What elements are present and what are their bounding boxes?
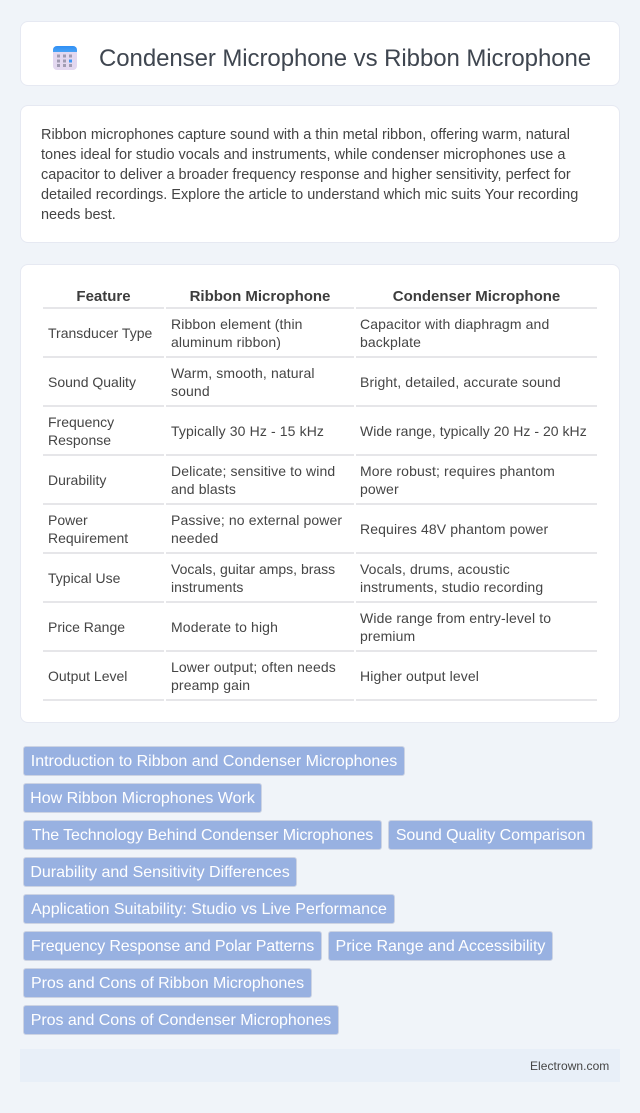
text: Requirement (48, 530, 128, 546)
text: Output Level (48, 668, 127, 684)
chip: condenser pros and cons (23, 1005, 339, 1035)
text: Delicate; sensitive to wind (171, 463, 335, 479)
text: Sound Quality (48, 374, 136, 390)
chip: sound quality: Sound Quality Comparison (396, 827, 585, 844)
text: Requires 48V phantom power (360, 521, 548, 537)
text: Frequency (48, 414, 114, 430)
footer (20, 1049, 620, 1082)
text: aluminum ribbon) (171, 334, 281, 350)
table row: Power Requirement (48, 512, 548, 546)
text: Capacitor with diaphragm and (360, 316, 549, 332)
text: Passive; no external power (171, 512, 342, 528)
chip: how ribbon works (23, 783, 262, 813)
chip: frequency (23, 931, 322, 961)
text: Higher output level (360, 668, 479, 684)
table row: Price Range (48, 610, 551, 644)
text: Lower output; often needs (171, 659, 336, 675)
text: premium (360, 628, 415, 644)
icon: calendar grid (53, 46, 77, 70)
text: power (360, 481, 399, 497)
table: header row (76, 288, 560, 305)
text: Moderate to high (171, 619, 278, 635)
text block: introduction: detailed recordings. Explore the article to understand which mic suits Your recording (41, 187, 578, 203)
heading: Feature: Feature (76, 288, 131, 305)
chip: how ribbon works: How Ribbon Microphones Work (30, 790, 255, 807)
panel: header (20, 21, 620, 86)
text: instruments, studio recording (360, 579, 543, 595)
chip: condenser pros and cons: Pros and Cons of Condenser Microphones (31, 1012, 331, 1029)
text: Bright, detailed, accurate sound (360, 374, 561, 390)
chip: condenser technology (23, 820, 382, 850)
text block: introduction: needs best. (41, 207, 116, 223)
text: Warm, smooth, natural (171, 365, 315, 381)
text: Ribbon element (thin (171, 316, 303, 332)
title: Condenser Microphone vs Ribbon Microphone (99, 45, 591, 72)
text: Price Range (48, 619, 125, 635)
chip: condenser technology: The Technology Behind Condenser Microphones (32, 827, 373, 844)
chip: introduction link: Introduction to Ribbon and Condenser Microphones (31, 753, 397, 770)
heading: Condenser Microphone: Condenser Microphone (393, 288, 560, 305)
text: preamp gain (171, 677, 250, 693)
chip: application (23, 894, 395, 924)
chip: durability: Durability and Sensitivity Differences (30, 864, 290, 881)
table row: Durability (48, 463, 555, 497)
footer credit: Electrown.com (530, 1059, 609, 1073)
chip: price (328, 931, 553, 961)
chip: frequency: Frequency Response and Polar Patterns (31, 938, 314, 955)
chip: price: Price Range and Accessibility (336, 938, 545, 955)
chip: introduction link (23, 746, 405, 776)
panel: introduction (20, 105, 620, 243)
chip: ribbon pros and cons (23, 968, 312, 998)
text: Typically 30 Hz - 15 kHz (171, 423, 324, 439)
text block: introduction (41, 127, 578, 223)
chip: application: Application Suitability: Studio vs Live Performance (31, 901, 387, 918)
chip: sound quality (388, 820, 593, 850)
text: Response (48, 432, 111, 448)
chip: durability (23, 857, 297, 887)
text: Typical Use (48, 570, 120, 586)
text: More robust; requires phantom (360, 463, 555, 479)
table row: Typical Use (48, 561, 543, 595)
panel: comparison table (20, 264, 620, 723)
table row: Transducer Type (48, 316, 549, 350)
text block: introduction: Ribbon microphones capture sound with a thin metal ribbon, offering warm, natural (41, 127, 570, 143)
table row: Sound Quality (48, 365, 561, 399)
text: Vocals, guitar amps, brass (171, 561, 335, 577)
text: Wide range, typically 20 Hz - 20 kHz (360, 423, 587, 439)
text: Vocals, drums, acoustic (360, 561, 510, 577)
text block: introduction: tones ideal for studio vocals and instruments, while condenser microphones use a (41, 147, 565, 163)
text: Power (48, 512, 88, 528)
table row: Output Level (48, 659, 479, 693)
text: backplate (360, 334, 421, 350)
text: Durability (48, 472, 106, 488)
text: instruments (171, 579, 243, 595)
text: and blasts (171, 481, 236, 497)
text: needed (171, 530, 218, 546)
text: Wide range from entry-level to (360, 610, 551, 626)
text block: introduction: capacitor to deliver a broader frequency response and higher sensitivity, perfect for (41, 167, 571, 183)
heading: Ribbon Microphone: Ribbon Microphone (190, 288, 330, 305)
chip: ribbon pros and cons: Pros and Cons of Ribbon Microphones (31, 975, 304, 992)
text: sound (171, 383, 210, 399)
text: Transducer Type (48, 325, 152, 341)
table row: Frequency Response (48, 414, 587, 448)
